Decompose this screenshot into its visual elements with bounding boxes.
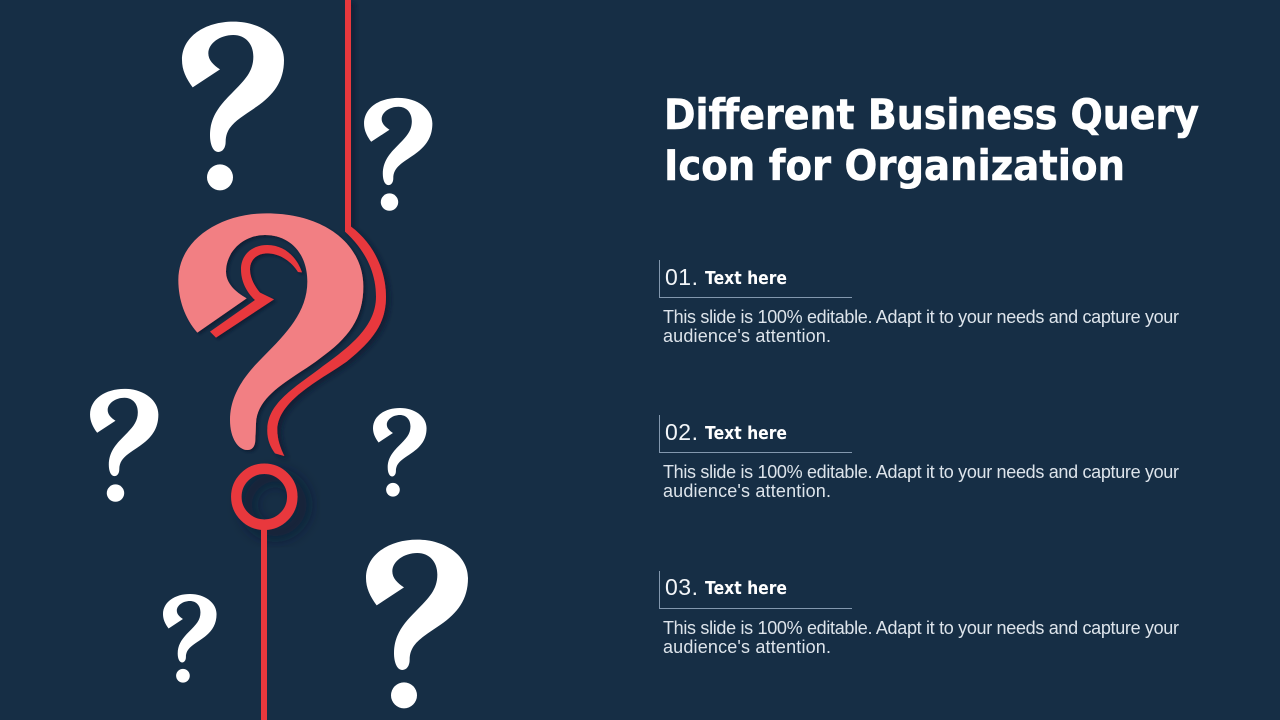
icon: large white question mark bottom right	[366, 540, 468, 708]
icon: large white question mark top	[182, 22, 284, 190]
item 01: 01.	[665, 264, 698, 290]
item 02	[660, 415, 1179, 501]
icon: small white question mark middle right	[373, 408, 427, 497]
item 03: This slide is 100% editable. Adapt it to your needs and capture your	[663, 618, 1179, 638]
icon: small white question mark bottom left	[163, 594, 217, 683]
item 02: audience's attention.	[663, 481, 831, 501]
item 03: 03.	[665, 574, 698, 600]
item 01: audience's attention.	[663, 326, 831, 346]
item 01: Text here	[705, 268, 787, 289]
item 01	[660, 260, 1179, 346]
red bottom connector line	[261, 528, 267, 720]
title: Different Business Query	[664, 90, 1199, 139]
icon: central pink and red question mark	[178, 0, 386, 720]
item 03: audience's attention.	[663, 637, 831, 657]
title: Icon for Organization	[664, 141, 1125, 190]
red ring dot	[236, 469, 292, 525]
item 01: This slide is 100% editable. Adapt it to your needs and capture your	[663, 307, 1179, 327]
icon: white question mark middle left	[90, 389, 158, 502]
title	[664, 90, 1199, 190]
item 02: This slide is 100% editable. Adapt it to your needs and capture your	[663, 462, 1179, 482]
item 02: Text here	[705, 423, 787, 444]
item 02: 02.	[665, 419, 698, 445]
red outline stroke with top connector	[267, 0, 386, 456]
item 03	[660, 571, 1179, 657]
icon: white question mark upper right	[364, 98, 432, 211]
item 03: Text here	[705, 578, 787, 599]
red inner curl	[210, 245, 302, 338]
pink question mark body	[178, 213, 363, 450]
